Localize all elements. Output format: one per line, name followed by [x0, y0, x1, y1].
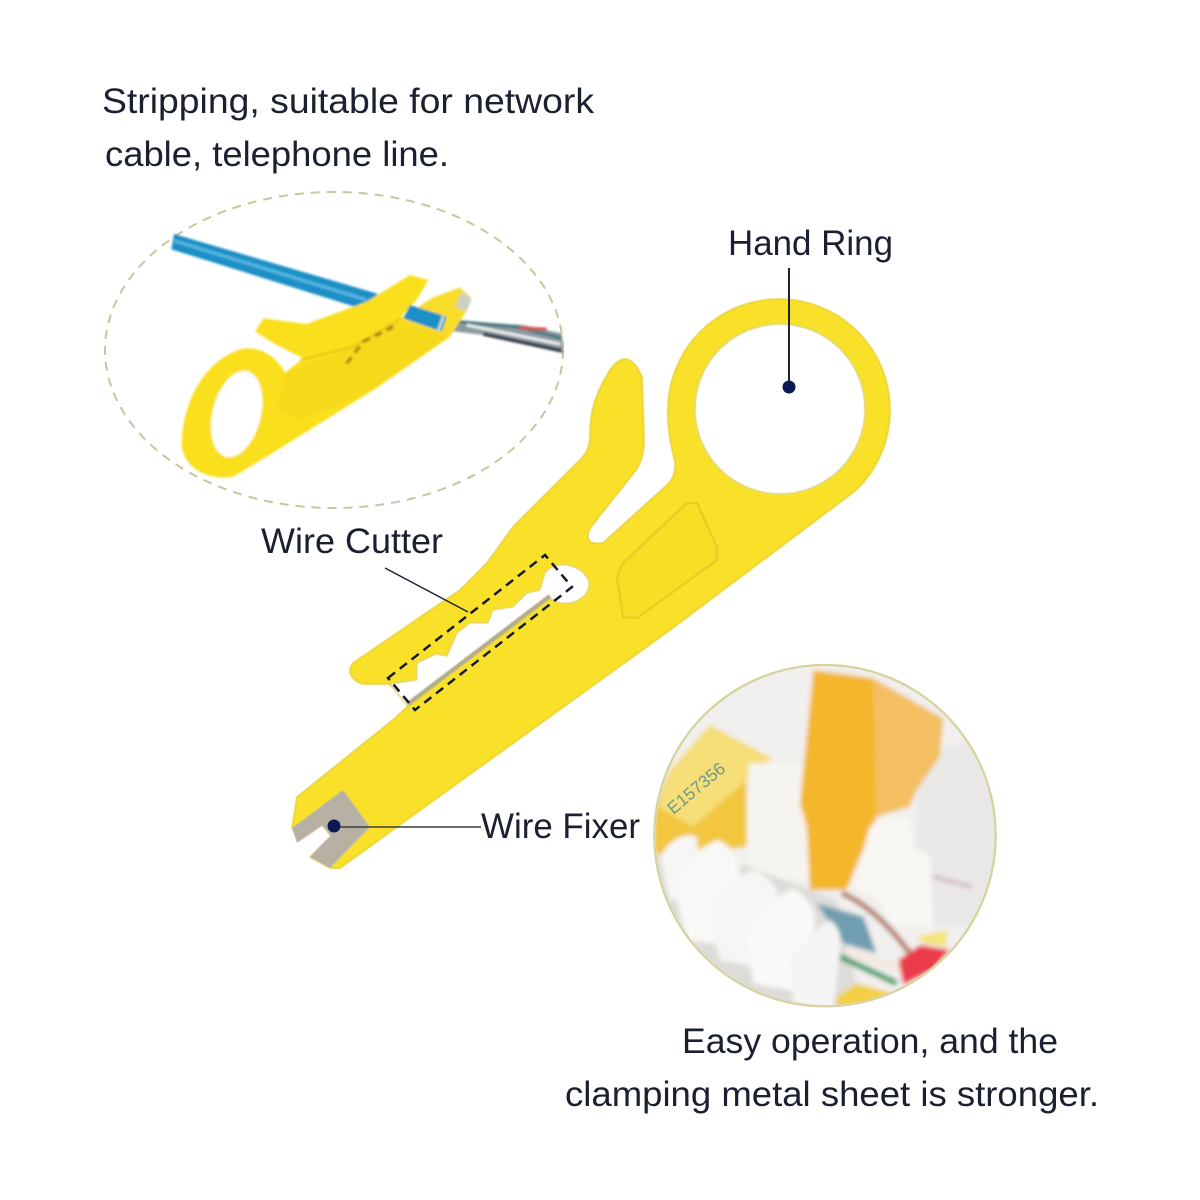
stripped wires — [443, 320, 563, 353]
small tool body — [182, 275, 450, 477]
metal blade edge — [408, 596, 550, 704]
ring hole — [203, 365, 271, 462]
panel: stripping close-up inset — [105, 192, 563, 508]
label: hand ring: Hand Ring — [728, 224, 893, 263]
red clip — [898, 945, 950, 985]
metal fixer plate — [292, 790, 370, 868]
text: stripping description: cable, telephone line. — [105, 135, 449, 174]
text: easy operation description — [565, 1022, 1099, 1114]
circle rim — [654, 665, 996, 1006]
central white block — [744, 760, 767, 780]
label: wire cutter — [261, 522, 468, 612]
text: stripping description: Stripping, suitable for network — [102, 82, 595, 121]
front white comb teeth — [660, 835, 703, 900]
cutter window with teeth — [390, 565, 589, 706]
yellow label block — [656, 774, 750, 858]
printed marks on the block: E157356 — [663, 758, 729, 818]
tool lower jaw — [307, 287, 472, 377]
tool body — [292, 299, 890, 868]
wires — [817, 903, 877, 953]
inset illustration: cable in small tool — [171, 234, 563, 477]
main yellow stripping tool — [292, 299, 890, 868]
right white fingers — [862, 822, 932, 926]
text: stripping description — [102, 82, 595, 174]
blue cable — [171, 234, 378, 308]
wire cutter dashed highlight — [388, 555, 572, 710]
infographic canvas — [104, 88, 1096, 1114]
photo contents — [656, 668, 986, 1005]
label: wire fixer: Wire Fixer — [481, 807, 640, 846]
label: wire cutter: Wire Cutter — [261, 522, 443, 561]
ring hole — [695, 324, 865, 494]
thumb pocket — [617, 503, 717, 618]
text: easy operation description: Easy operation, and the — [682, 1022, 1058, 1061]
text: easy operation description: clamping metal sheet is stronger. — [565, 1075, 1099, 1114]
light background — [656, 667, 965, 994]
dashed ellipse border — [105, 192, 563, 508]
panel: clamping close-up photo circle — [650, 660, 1003, 1013]
label: hand ring — [728, 224, 893, 394]
comb shadow base — [653, 853, 863, 1013]
blue cable end in jaw — [403, 305, 447, 332]
orange tool tip — [800, 670, 877, 890]
label: wire fixer — [328, 807, 640, 846]
